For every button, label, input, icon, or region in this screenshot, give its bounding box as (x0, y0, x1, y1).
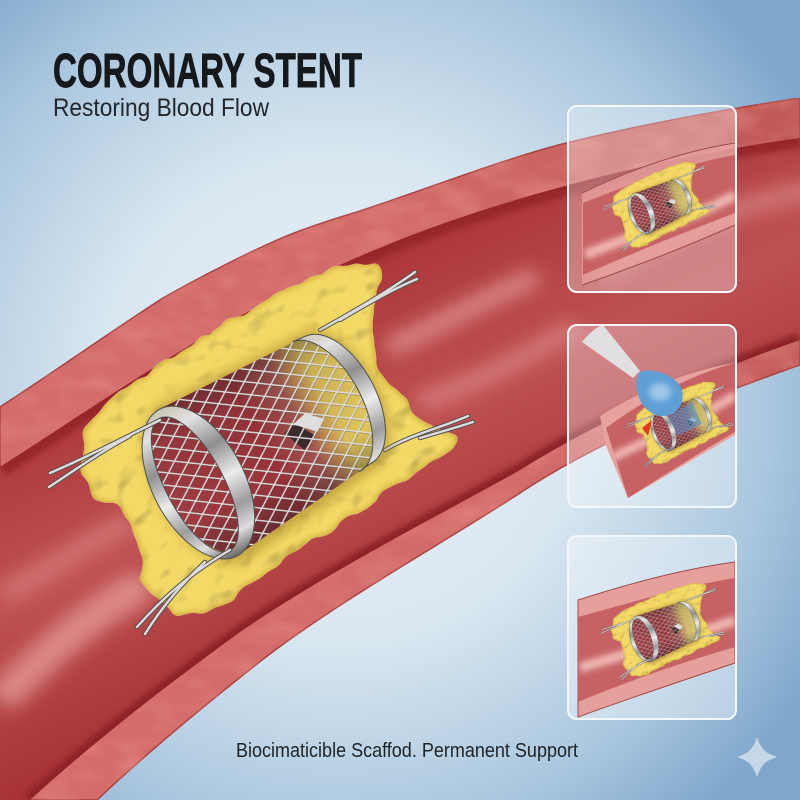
panel 1 border (568, 106, 736, 292)
panel 2 frosted fill (568, 325, 736, 507)
wire: lower left (137, 550, 230, 634)
panel 3 border (568, 536, 736, 719)
mini stent 3 (594, 569, 733, 695)
mini artery 3 (578, 562, 735, 717)
panel 1 frosted fill (568, 106, 736, 292)
red marker (642, 420, 652, 436)
panel 3 frosted fill (568, 536, 736, 719)
yellow plaque (83, 262, 460, 617)
wire: right (385, 416, 473, 450)
panel: stent in artery (568, 106, 736, 292)
panel: balloon deployment (568, 325, 738, 507)
stent body (128, 315, 414, 571)
stent cylinder (117, 310, 421, 585)
panel: stent in place (568, 536, 736, 719)
mini stent 1 (598, 152, 720, 261)
icon: sparkle (737, 737, 777, 777)
stent mesh (128, 315, 414, 571)
blue balloon (636, 370, 683, 416)
subtitle: Restoring Blood Flow (53, 94, 270, 122)
plaque shadow behind stent (119, 310, 421, 583)
mini stent 2 (622, 372, 738, 477)
main stent and plaque (49, 262, 473, 634)
left metal ring (119, 388, 278, 577)
body shading (128, 315, 414, 571)
balloon highlight (649, 383, 671, 401)
right metal ring (291, 318, 406, 472)
mini artery 2 (600, 363, 735, 498)
caption: Biocimaticible Scaffod. Permanent Support (236, 740, 578, 762)
wire: upper left (49, 420, 160, 487)
wire: upper right (320, 272, 417, 330)
panel 2 border (568, 325, 736, 507)
mini artery 1 (582, 143, 735, 285)
inner dark gap (282, 418, 319, 455)
blue stent overlay (668, 402, 702, 436)
balloon catheter (582, 325, 640, 378)
inner highlight (291, 407, 328, 440)
title: CORONARY STENT (53, 45, 362, 98)
